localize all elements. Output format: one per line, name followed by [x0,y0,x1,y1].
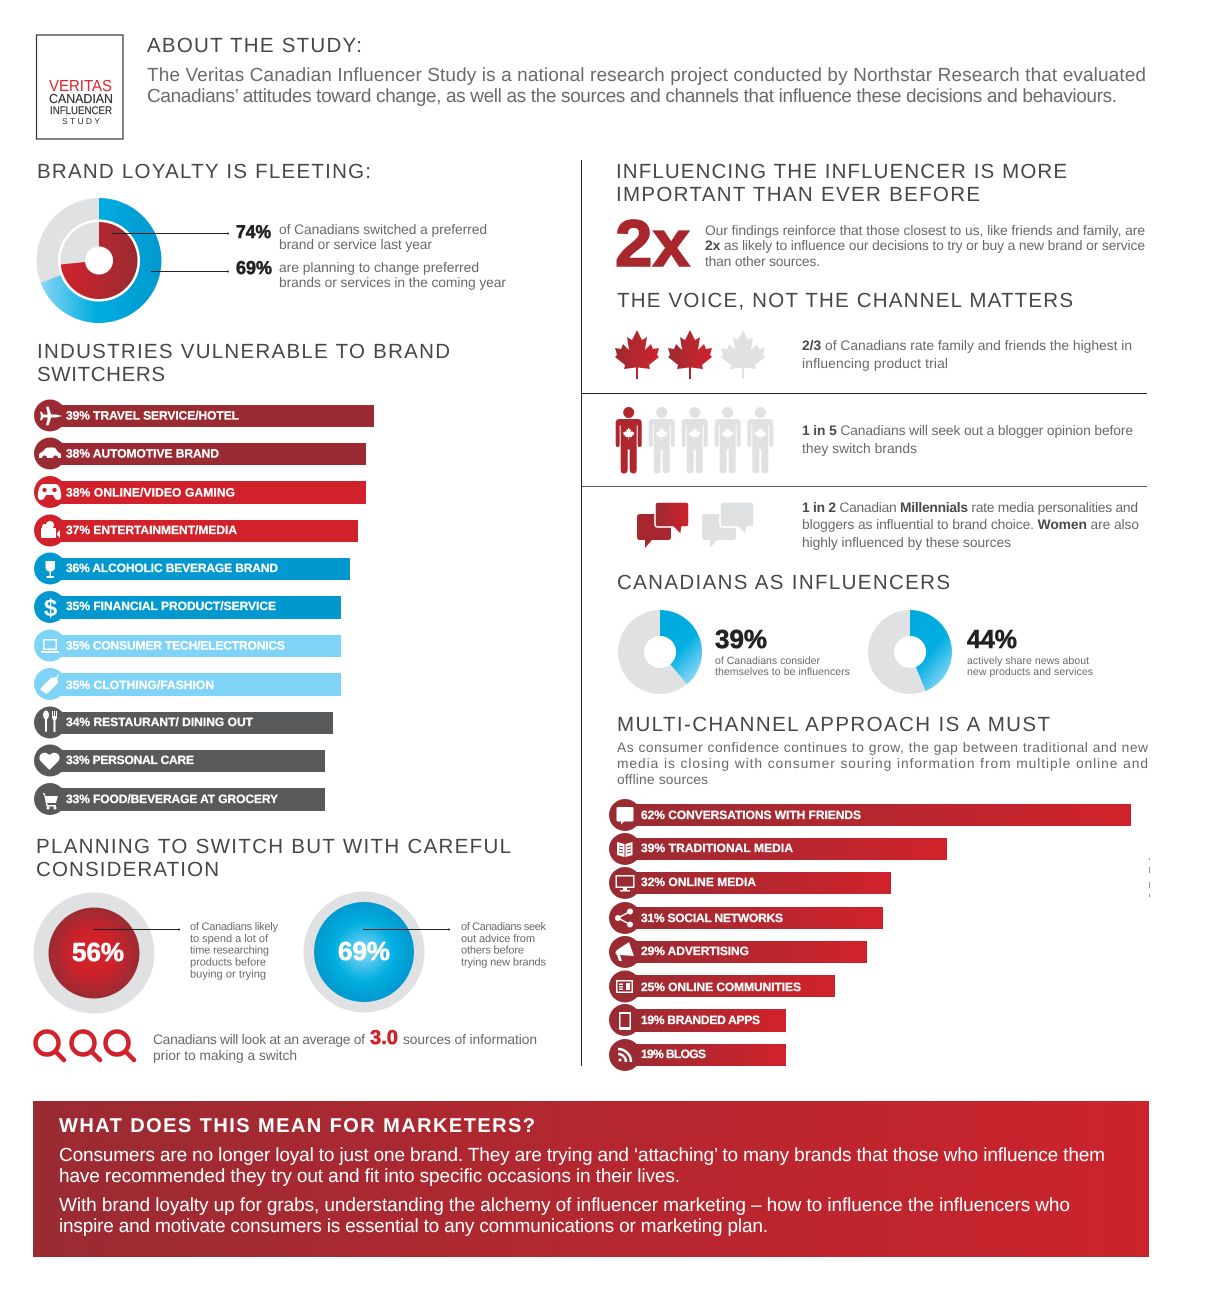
bar: automotive: 38% AUTOMOTIVE BRAND [66,446,219,460]
bar: consumer tech: 35% CONSUMER TECH/ELECTRONICS [66,638,285,652]
logo: Veritas Canadian Influencer Study: CANADIAN [49,91,113,106]
text block: multi-channel description [617,740,1148,787]
heading: planning to switch [36,835,511,881]
heading: planning to switch: PLANNING TO SWITCH BUT WITH CAREFUL [36,835,511,858]
chart: donut 39%: themselves to be influencers [715,666,850,678]
text block: findings: Our findings reinforce that those closest to us, like friends and family, are [705,223,1145,238]
text block: 1 in 2 [802,500,1139,550]
bar: social networks [609,902,883,934]
stat: 69% seek advice: trying new brands [461,956,546,968]
callout: 74% switched [112,221,487,252]
bar chart: industries [34,400,374,815]
text block: multi-channel description: offline sources [617,772,708,787]
text block: findings: than other sources. [705,254,820,269]
bar: entertainment: 37% ENTERTAINMENT/MEDIA [66,523,237,537]
text block: conclusion: have recommended they try out and fit into specific occasions in their lives. [59,1166,680,1187]
callout: 69% planning to change: are planning to change preferred [279,260,479,275]
text block: study description [147,65,1146,107]
callout: 74% switched: of Canadians switched a preferred [279,222,487,237]
callout: 69% planning to change: 69% [236,257,272,278]
bar: gaming: 38% ONLINE/VIDEO GAMING [66,486,235,500]
text block: 3.0 sources: prior to making a switch [153,1048,297,1063]
chart: donut 44%: actively share news about [967,655,1089,667]
chart: donut 44% [868,610,1093,694]
stat: 69% seek advice: out advice from [461,933,535,945]
chart: nested donut 69% and 74% [36,198,162,323]
heading: brand loyalty is fleeting: BRAND LOYALTY IS FLEETING: [37,160,371,183]
chart: donut 44%: new products and services [967,666,1093,678]
text block: 1 in 5: 1 in 5 Canadians will seek out a blogger opinion before [802,423,1133,438]
heading: influencing the influencer [616,160,1067,206]
text block: findings [705,223,1145,269]
bar: clothing: 35% CLOTHING/FASHION [66,678,214,692]
icon: five people 1 highlighted [616,407,773,474]
heading: about the study: ABOUT THE STUDY: [147,34,362,57]
heading: marketers: WHAT DOES THIS MEAN FOR MARKETERS? [59,1115,535,1137]
stat: 2x: 2x [615,206,690,280]
bar: alcoholic beverage: 36% ALCOHOLIC BEVERAGE BRAND [66,561,278,575]
callout: 74% switched: 74% [236,221,271,242]
logo: Veritas Canadian Influencer Study: STUDY [62,116,100,126]
heading: influencing the influencer: IMPORTANT THAN EVER BEFORE [616,183,980,206]
bar: food at grocery [34,783,325,815]
chart: donut 39%: of Canadians consider [715,655,820,667]
chart: donut 39% [618,610,850,694]
text block: study description: Canadians’ attitudes toward change, as well as the sources and channels that influence these decisions and behaviours. [147,86,1117,107]
icon: speech bubbles [637,502,754,548]
heading: industries vulnerable: SWITCHERS [37,363,165,386]
bar: financial: 35% FINANCIAL PRODUCT/SERVICE [66,599,276,613]
text block: 1 in 5 [802,423,1133,456]
bar: restaurant [34,706,333,738]
bar: financial: $ [44,595,58,622]
bar: online communities [609,970,835,1002]
bar: branded apps: 19% BRANDED APPS [641,1013,760,1027]
bar: branded apps [609,1004,786,1036]
bar: food at grocery: 33% FOOD/BEVERAGE AT GROCERY [66,792,278,806]
bar: travel [34,400,374,432]
bar: advertising: 29% ADVERTISING [641,944,749,958]
text block: 1 in 2: 1 in 2 Canadian Millennials rate media personalities and [802,500,1138,515]
stat: 69% seek advice [304,892,546,1012]
stat: 69% seek advice: of Canadians seek [461,921,546,933]
bar: consumer tech [34,630,341,662]
bar: restaurant: 34% RESTAURANT/ DINING OUT [66,715,254,729]
text block: 1 in 5: they switch brands [802,441,917,456]
text block: 2/3: influencing product trial [802,356,948,371]
bar: traditional media: 39% TRADITIONAL MEDIA [641,841,793,855]
panel: brand loyalty [36,160,506,323]
heading: the voice not the channel: THE VOICE, NOT THE CHANNEL MATTERS [617,289,1073,312]
bar: advertising [609,936,867,968]
callout: 69% planning to change [151,257,506,290]
bar: alcoholic beverage [34,552,350,584]
text block: 3.0 sources: sources of information [403,1032,537,1047]
text block: conclusion [59,1145,1105,1237]
bar chart: sources [609,799,1131,1071]
bar: social networks: 31% SOCIAL NETWORKS [641,911,783,925]
heading: industries vulnerable [37,340,450,386]
panel: about the study [147,34,1146,107]
text block: multi-channel description: media is closing with consumer souring information from multiple online and [617,756,1148,771]
bar: travel: 39% TRAVEL SERVICE/HOTEL [66,408,239,422]
text block: conclusion: Consumers are no longer loyal to just one brand. They are trying and ‘attaching’ to many brands that those who influence them [59,1145,1105,1166]
text block: 3.0 sources [153,1027,537,1063]
bar: blogs [609,1039,786,1071]
stat: 56% researching: products before [190,956,266,968]
icon: maple leaves 2 of 3 [615,330,765,379]
text block: 1 in 2: highly influenced by these sources [802,535,1011,550]
stat: 56% researching: of Canadians likely [190,921,278,933]
text block: 3.0 sources: 3.0 [370,1027,398,1049]
logo: Veritas Canadian Influencer Study [36,35,123,139]
bar: online media: 32% ONLINE MEDIA [641,875,756,889]
stat: 56% researching: buying or trying [190,968,266,980]
heading: canadians as influencers: CANADIANS AS INFLUENCERS [617,571,950,594]
stat: 69% seek advice: 69% [338,936,390,966]
stat: 56% researching: 56% [72,937,124,967]
chart: donut 44%: 44% [967,624,1017,654]
text block: findings: 2x as likely to influence our decisions to try or buy a new brand or service [705,238,1145,253]
bar: personal care [34,744,325,776]
heading: influencing the influencer: INFLUENCING THE INFLUENCER IS MORE [616,160,1067,183]
logo: Veritas Canadian Influencer Study: VERITAS [49,78,112,95]
text block: study description: The Veritas Canadian Influencer Study is a national research project conducted by Northstar Research that evaluated [147,65,1146,86]
bar: personal care: 33% PERSONAL CARE [66,753,194,767]
heading: industries vulnerable: INDUSTRIES VULNERABLE TO BRAND [37,340,450,363]
heading: multi-channel approach: MULTI-CHANNEL APPROACH IS A MUST [617,713,1050,736]
bar: blogs: 19% BLOGS [641,1047,706,1061]
bar: clothing [34,668,341,700]
text block: multi-channel description: As consumer confidence continues to grow, the gap between traditional and new [617,740,1148,755]
chart: donut 39%: 39% [715,624,767,654]
callout: 69% planning to change: brands or services in the coming year [279,275,506,290]
stat: 56% researching: time researching [190,944,269,956]
bar: automotive [34,438,366,470]
bar: traditional media [609,833,947,865]
stat: 69% seek advice: others before [461,944,524,956]
bar: conversations: 62% CONVERSATIONS WITH FRIENDS [641,808,861,822]
panel: what does this mean for marketers [33,1101,1149,1257]
bar: conversations [609,799,1131,831]
bar: online communities: 25% ONLINE COMMUNITIES [641,980,801,994]
text block: 1 in 2: bloggers as influential to brand choice. Women are also [802,517,1139,532]
bar: online media [609,867,891,899]
logo: Veritas Canadian Influencer Study: INFLUENCER [50,105,112,117]
stat: 56% researching [34,892,278,1014]
bar: financial [34,591,341,623]
text block: 3.0 sources: Canadians will look at an average of [153,1032,365,1047]
callout: 74% switched: brand or service last year [279,237,432,252]
text block: 2/3: 2/3 of Canadians rate family and friends the highest in [802,338,1132,353]
icon: three magnifiers [36,1032,134,1060]
heading: planning to switch: CONSIDERATION [36,858,219,881]
bar: entertainment [34,514,358,546]
text block: conclusion: With brand loyalty up for grabs, understanding the alchemy of influencer marketing – how to influence the influencers who [59,1195,1070,1216]
text block: 2/3 [802,338,1132,371]
text block: conclusion: inspire and motivate consumers is essential to any communications or marketing plan. [59,1216,768,1237]
stat: 56% researching: to spend a lot of [190,933,269,945]
bar: gaming [34,476,366,508]
